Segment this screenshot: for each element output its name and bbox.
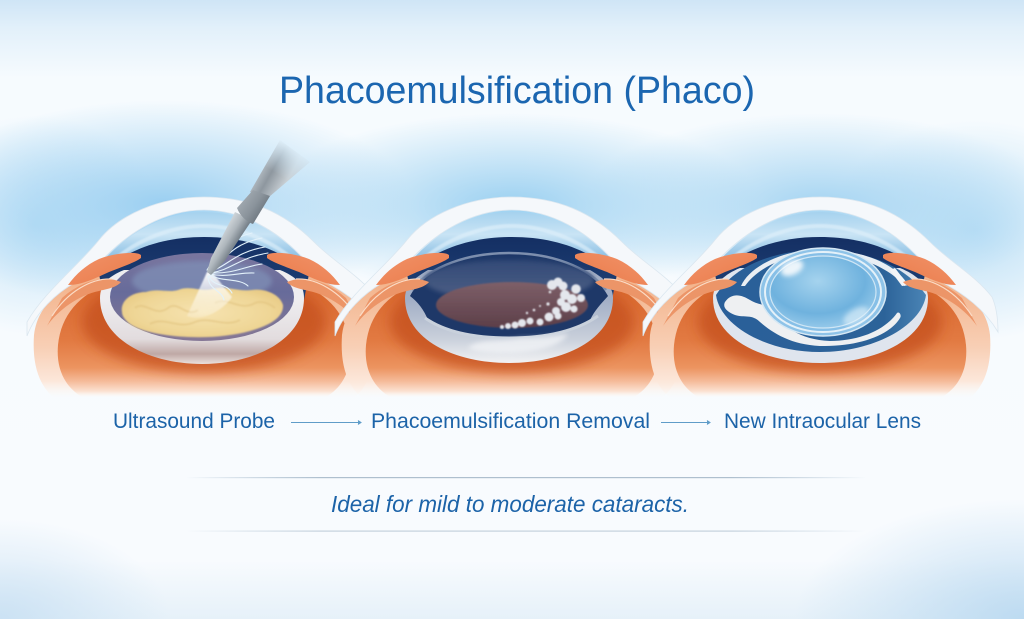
milky residue	[468, 334, 568, 353]
lens capsule rim	[713, 268, 928, 363]
upper haptic	[741, 249, 908, 286]
dark haze inside capsule	[424, 260, 594, 300]
eye panel: new intraocular lens	[643, 197, 998, 398]
capsule blue interior	[716, 250, 926, 352]
capsule lower lip	[425, 316, 598, 338]
lens capsule rim	[100, 270, 304, 364]
iris flaps	[47, 253, 361, 326]
step labels and arrows	[113, 410, 921, 433]
lower haptic	[724, 295, 901, 346]
lens capsule interior	[110, 253, 294, 341]
intraocular lens	[760, 248, 886, 336]
capsule upper rim line	[412, 253, 606, 290]
tagline: Ideal for mild to moderate cataracts.	[331, 491, 689, 517]
capsule interior	[410, 252, 608, 337]
iris flaps	[355, 253, 669, 326]
ultrasound spray	[187, 272, 232, 318]
blue haze inside capsule	[132, 261, 272, 301]
remaining brown lens	[436, 282, 588, 328]
title: Phacoemulsification (Phaco)	[279, 70, 755, 112]
cataract nucleus	[122, 288, 283, 337]
label: phacoemulsification removal: Phacoemulsification Removal	[371, 410, 650, 433]
lens capsule rim	[405, 270, 613, 363]
eye shell: sclera, cornea and orange tissue	[643, 197, 998, 398]
ultrasound probe	[207, 140, 310, 275]
ultrasound waves	[207, 233, 268, 300]
eye panel: ultrasound probe	[27, 140, 382, 398]
label: ultrasound probe: Ultrasound Probe	[113, 410, 275, 433]
eye panel: phacoemulsification removal	[335, 197, 690, 398]
arrow 1	[291, 420, 361, 424]
eye shell: sclera, cornea and orange tissue	[335, 197, 690, 398]
eye shell: sclera, cornea and orange tissue	[27, 197, 382, 398]
label: new intraocular lens: New Intraocular Lens	[724, 410, 921, 433]
upper haptic end	[890, 268, 908, 286]
arrow 2	[661, 420, 710, 424]
emulsified fragments	[500, 278, 585, 329]
iris flaps	[663, 253, 977, 326]
